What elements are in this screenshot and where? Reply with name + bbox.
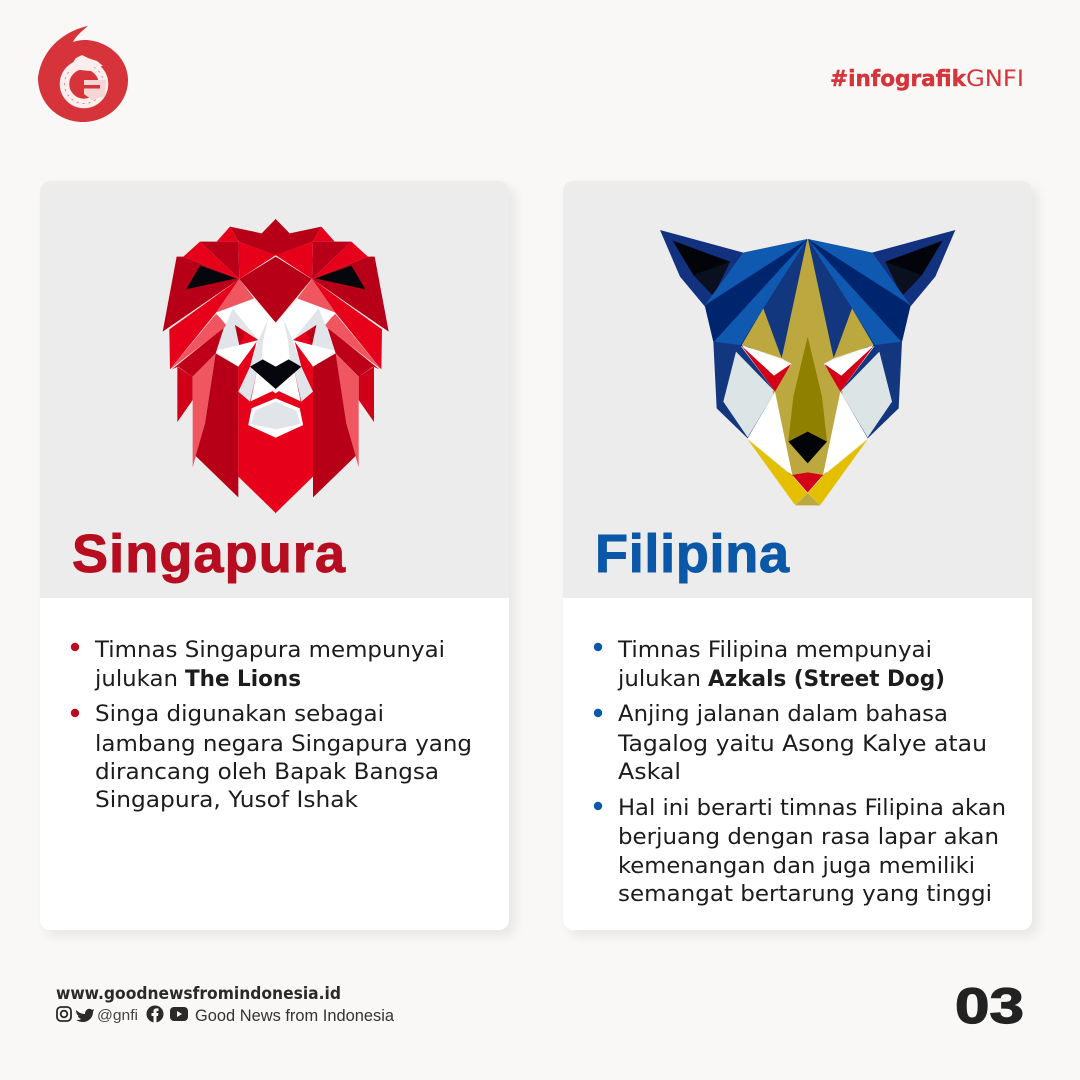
text block: Singapura facts: Singapura, Yusof Ishak: [95, 788, 358, 813]
text block: Filipina facts: Hal ini berarti timnas Filipina akan: [618, 796, 1006, 821]
text block: Filipina facts: Azkals (Street Dog): [708, 667, 945, 692]
footer: website and social handles: Good News from Indonesia: [195, 1006, 395, 1025]
text block: Singapura facts: The Lions: [185, 667, 301, 692]
text block: Filipina facts: Tagalog yaitu Asong Kalye atau: [617, 732, 987, 757]
text block: Filipina facts: berjuang dengan rasa lapar akan: [618, 825, 999, 850]
text block: Filipina facts: Timnas Filipina mempunyai: [617, 638, 932, 663]
footer: website and social handles: @gnfi: [97, 1007, 138, 1024]
text block: Filipina facts: Askal: [618, 760, 681, 785]
icon: facebook: [146, 1006, 164, 1023]
panel: Singapura: [40, 181, 515, 936]
text block: Singapura facts: julukan: [94, 667, 178, 692]
icon: geometric lion head: [163, 219, 389, 513]
text block: Filipina facts: Anjing jalanan dalam bahasa: [618, 702, 948, 727]
text block: Filipina facts: semangat bertarung yang tinggi: [618, 882, 992, 907]
text block: Singapura facts: [71, 638, 472, 813]
text block: Filipina facts: [594, 638, 1006, 907]
panel: Filipina: [563, 181, 1038, 936]
page number: 03: [955, 978, 1024, 1034]
hashtag: #infografikGNFI: GNFI: [966, 67, 1024, 92]
text block: Singapura facts: Singa digunakan sebagai: [95, 702, 384, 727]
footer: website and social handles: [56, 984, 395, 1025]
text block: Filipina facts: julukan: [617, 667, 701, 692]
icon: twitter: [76, 1009, 94, 1022]
heading: Filipina: Filipina: [595, 524, 790, 584]
footer: website and social handles: www.goodnewsfromindonesia.id: [56, 984, 341, 1003]
logo: GNFI red six mark: [38, 26, 128, 122]
text block: Singapura facts: lambang negara Singapura yang: [95, 732, 472, 757]
text block: Filipina facts: kemenangan dan juga memiliki: [618, 854, 975, 879]
text block: Singapura facts: dirancang oleh Bapak Bangsa: [95, 760, 439, 785]
hashtag: #infografikGNFI: #infografik: [830, 67, 967, 92]
icon: geometric street dog head: [660, 230, 955, 505]
icon: youtube: [170, 1007, 188, 1021]
heading: Singapura: Singapura: [72, 524, 346, 584]
icon: instagram: [57, 1007, 71, 1021]
text block: Singapura facts: Timnas Singapura mempunyai: [94, 638, 445, 663]
